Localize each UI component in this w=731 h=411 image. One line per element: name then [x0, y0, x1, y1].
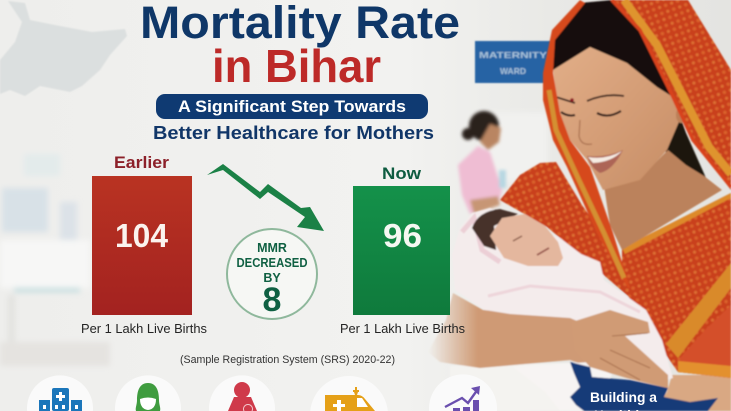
title: in Bihar — [212, 40, 381, 92]
arrow: downward trend — [207, 164, 324, 231]
nose — [579, 120, 592, 144]
icon: hospital — [27, 375, 93, 411]
veil left — [543, 0, 630, 288]
closed eyes — [561, 111, 621, 116]
maternity ward sign — [475, 41, 551, 83]
brows — [556, 95, 624, 103]
saree body — [500, 162, 731, 378]
maternity ward sign: MATERNITY — [479, 50, 547, 60]
veil gold border — [624, 0, 731, 174]
bar: now — [340, 164, 465, 336]
baby hair — [472, 209, 518, 250]
subtitle pill: A Significant Step Towards — [178, 97, 406, 116]
tabletop — [450, 362, 600, 411]
bindi — [570, 98, 574, 102]
baby eye — [513, 236, 522, 241]
baby mouth — [537, 248, 549, 255]
hand over blanket — [572, 310, 668, 388]
veil right — [610, 0, 731, 190]
map caption: Building a — [590, 389, 657, 405]
left arm — [428, 293, 668, 388]
neck and chest — [604, 150, 722, 250]
finger creases — [600, 333, 650, 380]
subtitle second line: Better Healthcare for Mothers — [153, 123, 434, 143]
background Bihar map silhouette — [0, 1, 127, 96]
maternity ward sign: WARD — [500, 66, 526, 76]
bar: earlier — [81, 153, 207, 336]
callout: MMR decreased by 8: BY — [263, 271, 281, 285]
hair behind ear — [664, 97, 706, 178]
source note: (Sample Registration System (SRS) 2020-22) — [180, 354, 395, 366]
face — [553, 47, 681, 190]
icon: mother with child — [209, 375, 275, 411]
icon: woman — [115, 375, 181, 411]
blurred hospital ward background — [0, 112, 548, 366]
swaddle blanket — [452, 208, 673, 380]
bar: earlier: Earlier — [114, 153, 169, 172]
mother and baby photo — [428, 0, 731, 411]
subtitle pill — [156, 94, 428, 119]
baby face — [490, 214, 563, 266]
bar: earlier: Per 1 Lakh Live Births — [81, 321, 207, 336]
bar: now: Now — [382, 164, 422, 183]
saree lower pleats — [678, 305, 731, 378]
icon: rising chart — [429, 374, 497, 411]
bar: now: Per 1 Lakh Live Births — [340, 321, 465, 336]
title — [140, 0, 460, 92]
bar: earlier: 104 — [115, 217, 169, 254]
smile — [587, 150, 623, 173]
callout: MMR decreased by 8 — [227, 229, 317, 319]
right forearm — [655, 375, 731, 411]
icon: ambulance — [310, 376, 388, 411]
callout: MMR decreased by 8: 8 — [263, 281, 281, 319]
callout: MMR decreased by 8: MMR — [257, 241, 287, 255]
ear — [676, 107, 686, 123]
callout: MMR decreased by 8: DECREASED — [236, 256, 308, 270]
nurse in background — [458, 111, 506, 214]
saree gold border — [666, 263, 731, 358]
hair — [549, 0, 675, 100]
bar: now: 96 — [383, 217, 422, 254]
blue Bihar map — [570, 362, 718, 411]
